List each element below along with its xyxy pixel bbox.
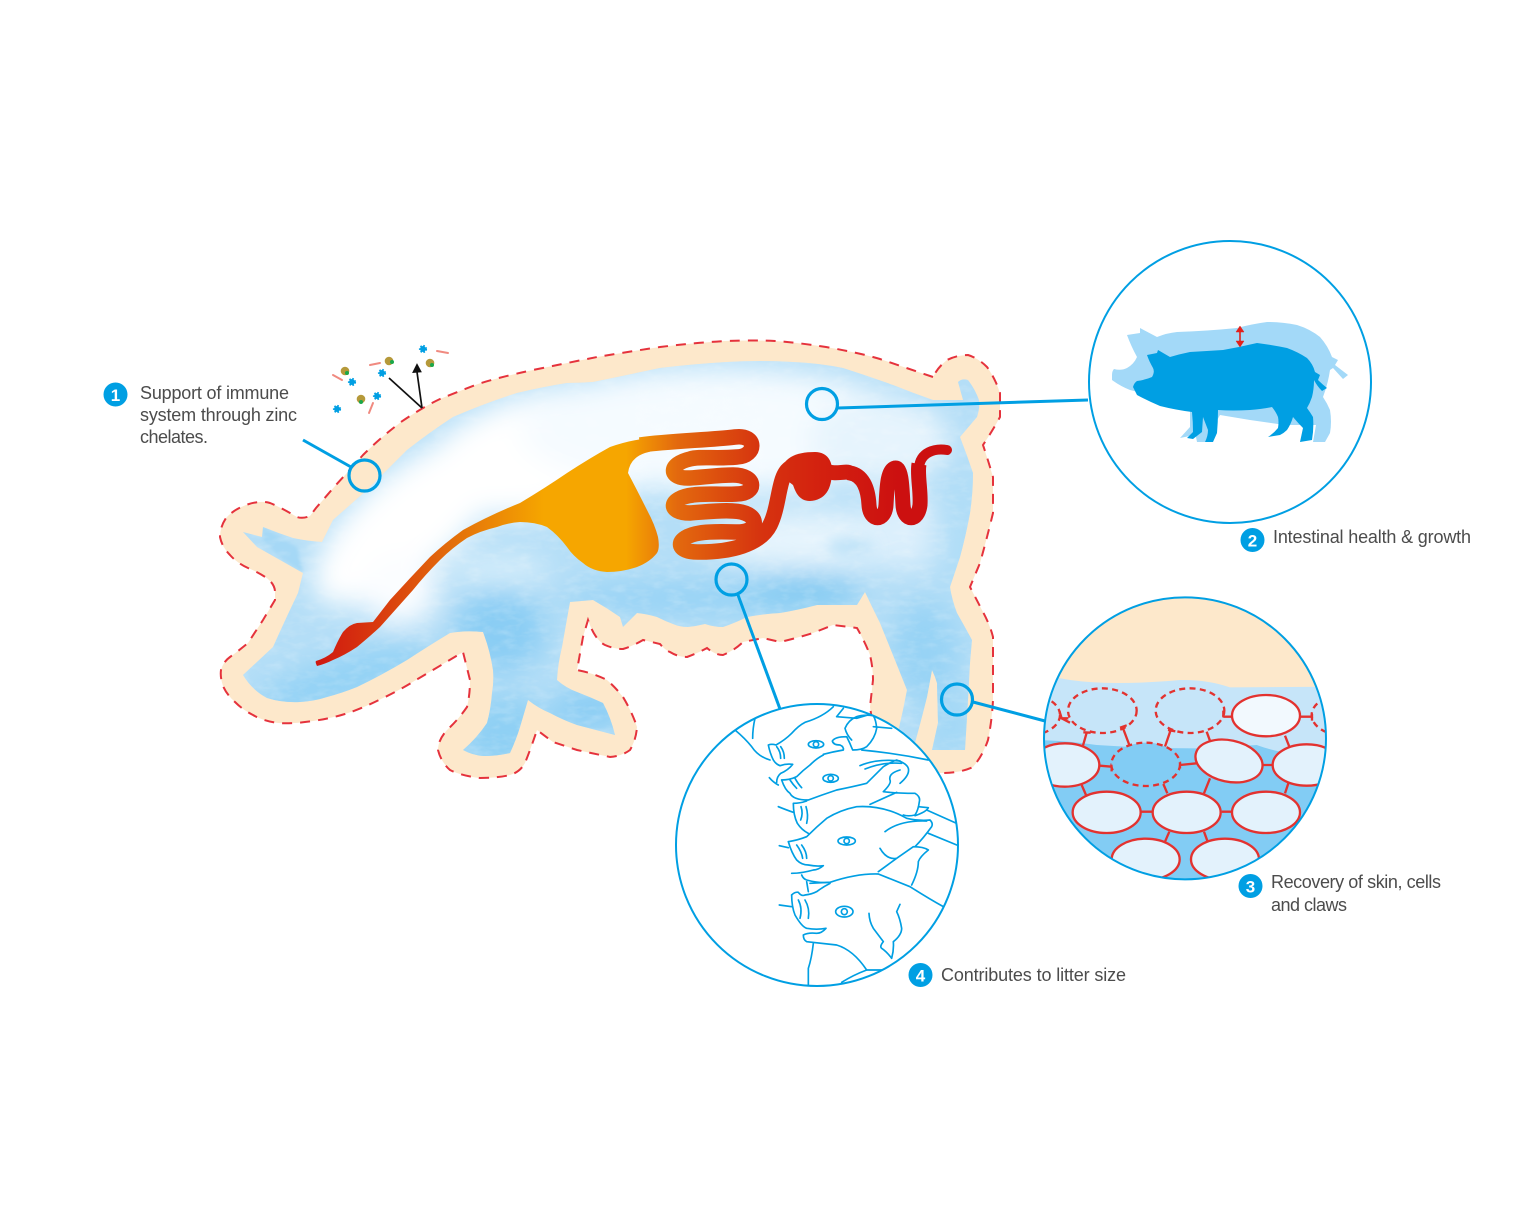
pig ear xyxy=(263,527,303,573)
panel: growth pig circle xyxy=(1089,241,1371,523)
panel: piglets line art circle xyxy=(676,704,958,986)
piglet 1 xyxy=(735,718,770,760)
particles: zinc chelates xyxy=(333,346,448,413)
healthy cells xyxy=(1045,694,1325,877)
callout 1: immune support xyxy=(104,382,297,447)
halo: cream outline around pig with red dashed border xyxy=(220,340,1000,778)
badge 4: 4 xyxy=(916,966,926,986)
marker circles on pig xyxy=(349,388,972,715)
piglet 4 xyxy=(779,883,830,907)
callout 3: skin recovery xyxy=(1238,872,1441,915)
small and large intestine xyxy=(640,437,790,552)
callout 2: intestinal health xyxy=(1240,527,1471,552)
dashed damaged cells xyxy=(1045,687,1325,788)
icon: smaller solid pig xyxy=(1133,343,1327,442)
badge 3: 3 xyxy=(1246,878,1255,896)
label 3: and claws xyxy=(1271,895,1347,915)
panel: skin cells circle xyxy=(1043,596,1327,880)
label 1 xyxy=(140,383,297,447)
piglet 2 xyxy=(782,760,909,800)
label 1: chelates. xyxy=(140,427,208,447)
caecum bulge xyxy=(780,452,832,501)
icon: red growth arrow xyxy=(1236,326,1244,347)
badge 1: 1 xyxy=(111,386,120,405)
piglet 3 xyxy=(778,801,808,833)
arrows from skin xyxy=(389,365,422,408)
badge 4 xyxy=(908,963,932,987)
label 2: Intestinal health & growth xyxy=(1273,527,1471,547)
badge 1 xyxy=(104,382,128,406)
label 1: Support of immune xyxy=(140,383,289,403)
badge 2: 2 xyxy=(1248,532,1257,550)
label 4: Contributes to litter size xyxy=(941,965,1126,985)
badge 2 xyxy=(1240,528,1264,552)
label 3: Recovery of skin, cells xyxy=(1271,872,1441,892)
callout 4: litter size xyxy=(908,963,1126,987)
pig body: photo-like blue silhouette xyxy=(243,361,980,756)
label 3 xyxy=(1271,872,1441,915)
connector lines xyxy=(303,400,1088,721)
oesophagus and stomach xyxy=(316,438,660,666)
label 1: system through zinc xyxy=(140,405,297,425)
badge 3 xyxy=(1238,874,1262,898)
digestive tract xyxy=(316,437,947,666)
cell connectors xyxy=(1059,711,1312,842)
icon: larger pale pig xyxy=(1112,322,1348,442)
